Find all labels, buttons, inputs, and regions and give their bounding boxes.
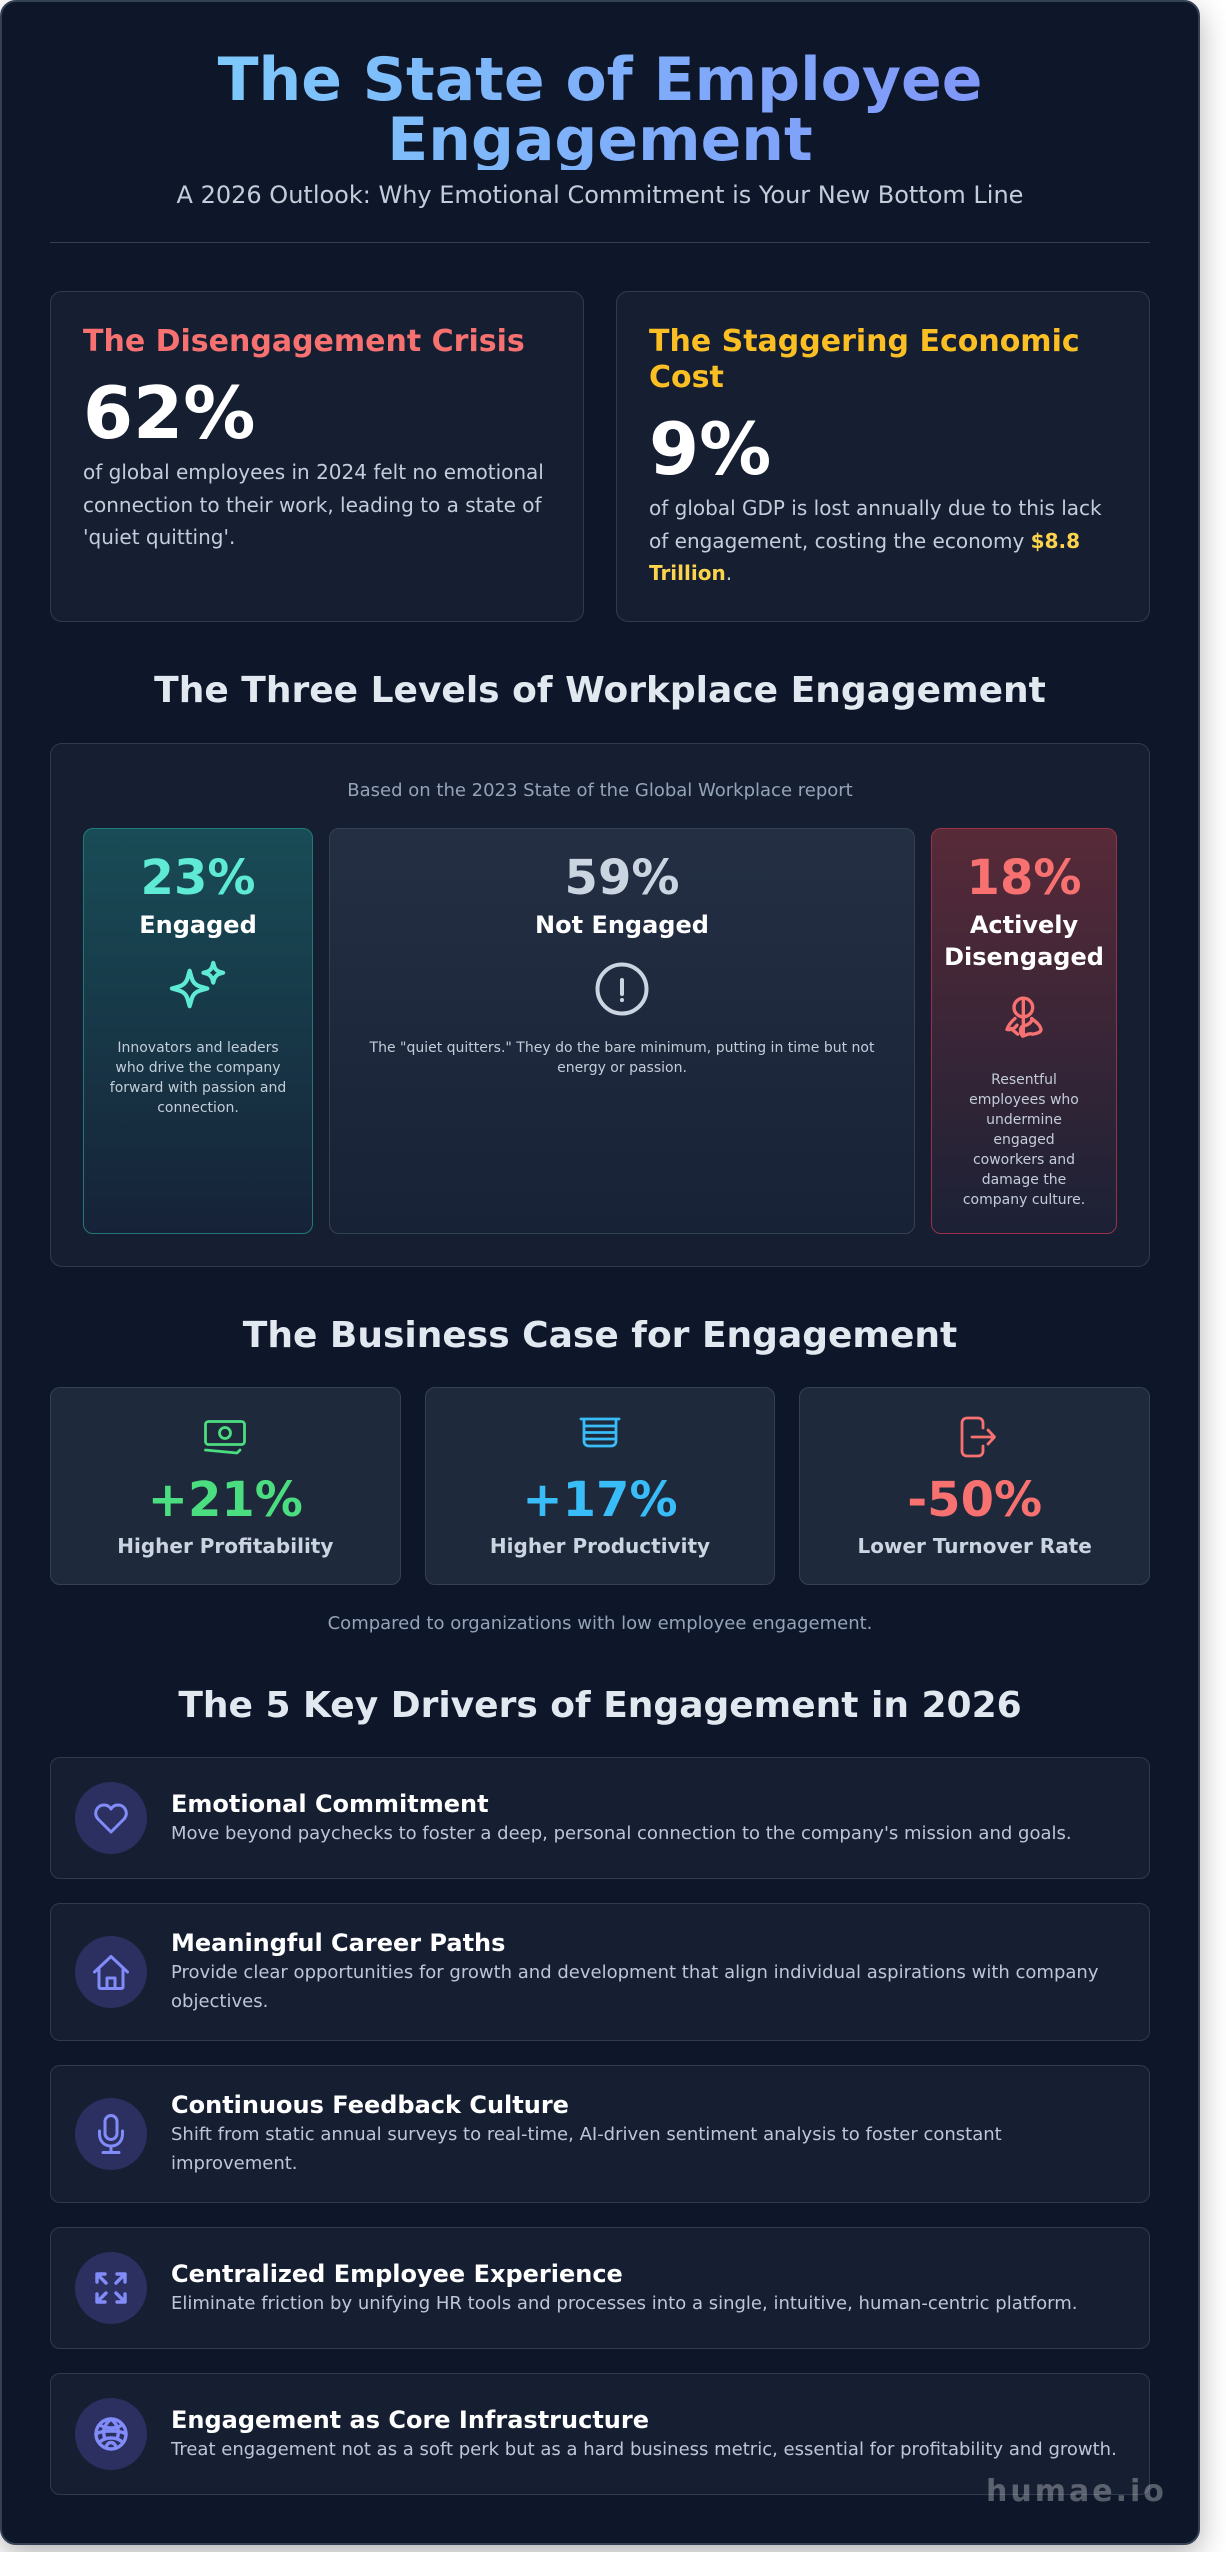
card: turnover xyxy=(799,1387,1150,1585)
panel: three levels xyxy=(50,743,1150,1267)
text: engaged description: forward with passion and xyxy=(110,1080,286,1096)
header divider xyxy=(50,242,1150,243)
text: disengaged description xyxy=(963,1072,1085,1208)
label: not engaged: Not Engaged xyxy=(535,911,709,939)
title: The State of Employee xyxy=(218,45,982,115)
heading: economic cost xyxy=(649,324,1080,395)
title xyxy=(50,50,1150,170)
driver: feedback culture xyxy=(50,2065,1150,2203)
card: profitability xyxy=(50,1387,401,1585)
stat: 18%: 18% xyxy=(967,850,1081,906)
label: actively disengaged xyxy=(944,911,1104,970)
title: Engagement xyxy=(387,105,813,175)
text: crisis description xyxy=(83,460,544,549)
label: actively disengaged: Disengaged xyxy=(944,942,1104,970)
text: not engaged description: The "quiet quitters." They do the bare minimum, putting in time but not xyxy=(370,1040,874,1056)
stat: 23%: 23% xyxy=(141,850,255,906)
text: engaged description xyxy=(110,1040,286,1116)
icon: globe xyxy=(75,2398,147,2470)
title: Continuous Feedback Culture xyxy=(171,2091,569,2119)
label: actively disengaged: Actively xyxy=(970,911,1078,939)
column: not engaged xyxy=(329,828,915,1234)
text: cost description: of global GDP is lost annually due to this lack xyxy=(649,496,1102,520)
driver: career paths xyxy=(50,1903,1150,2041)
icon: exit arrow xyxy=(960,1416,996,1458)
column: actively disengaged xyxy=(931,828,1117,1234)
note: comparison: Compared to organizations with low employee engagement. xyxy=(328,1613,872,1634)
icon: arrows expand xyxy=(75,2252,147,2324)
label: engaged: Engaged xyxy=(139,911,257,939)
text: engaged description: connection. xyxy=(157,1100,239,1116)
heading: key drivers: The 5 Key Drivers of Engagement in 2026 xyxy=(178,1685,1022,1726)
label: turnover: Lower Turnover Rate xyxy=(857,1534,1092,1558)
text: disengaged description: undermine xyxy=(986,1112,1062,1128)
text: disengaged description: coworkers and xyxy=(973,1152,1075,1168)
icon: microphone xyxy=(75,2098,147,2170)
description: Treat engagement not as a soft perk but as a hard business metric, essential for profitability and growth. xyxy=(171,2439,1117,2460)
description: Provide clear opportunities for growth and development that align individual aspirations with company xyxy=(171,1962,1098,1983)
icon: stack xyxy=(580,1418,620,1448)
text: disengaged description: damage the xyxy=(982,1172,1066,1188)
heading: disengagement crisis: The Disengagement Crisis xyxy=(83,324,525,359)
heading: economic cost: The Staggering Economic xyxy=(649,324,1080,359)
heading: business case: The Business Case for Engagement xyxy=(243,1315,957,1356)
panel: disengagement crisis xyxy=(50,291,584,622)
label: profitability: Higher Profitability xyxy=(117,1534,333,1558)
text: engaged description: who drive the company xyxy=(115,1060,281,1076)
icon: home xyxy=(75,1936,147,2008)
text: crisis description: 'quiet quitting'. xyxy=(83,525,235,549)
title: Engagement as Core Infrastructure xyxy=(171,2406,649,2434)
stat: -50%: -50% xyxy=(907,1472,1042,1528)
icon: heart xyxy=(75,1782,147,1854)
text: cost description: of engagement, costing the economy $8.8 xyxy=(649,529,1080,553)
text: crisis description: connection to their work, leading to a state of xyxy=(83,493,542,517)
source note: Based on the 2023 State of the Global Workplace report xyxy=(347,780,853,801)
description: Move beyond paychecks to foster a deep, personal connection to the company's mission and goals. xyxy=(171,1823,1072,1844)
text: cost description: Trillion. xyxy=(649,561,732,585)
text: disengaged description: company culture. xyxy=(963,1192,1085,1208)
text: not engaged description xyxy=(369,1040,874,1076)
driver: core infrastructure xyxy=(50,2373,1150,2495)
column: engaged xyxy=(83,828,313,1234)
driver: employee experience xyxy=(50,2227,1150,2349)
heading: three levels: The Three Levels of Workplace Engagement xyxy=(154,670,1046,711)
stat: 62%: 62% xyxy=(83,371,255,455)
card: productivity xyxy=(425,1387,775,1585)
stat: 9%: 9% xyxy=(649,407,771,491)
subtitle: A 2026 Outlook: Why Emotional Commitment is Your New Bottom Line xyxy=(177,180,1023,208)
text: disengaged description: engaged xyxy=(993,1132,1055,1148)
driver: emotional commitment xyxy=(50,1757,1150,1879)
stat: 59%: 59% xyxy=(565,850,679,906)
label: productivity: Higher Productivity xyxy=(490,1534,710,1558)
title: Centralized Employee Experience xyxy=(171,2260,623,2288)
text: crisis description: of global employees in 2024 felt no emotional xyxy=(83,460,544,484)
description: Eliminate friction by unifying HR tools and processes into a single, intuitive, human-centric platform. xyxy=(171,2293,1078,2314)
text: engaged description: Innovators and leaders xyxy=(117,1040,279,1056)
title: Meaningful Career Paths xyxy=(171,1929,505,1957)
icon: exclamation circle xyxy=(596,962,648,1016)
description: improvement. xyxy=(171,2153,298,2174)
description: Shift from static annual surveys to real-time, AI-driven sentiment analysis to foster constant xyxy=(171,2124,1002,2145)
text: disengaged description: Resentful xyxy=(991,1072,1057,1088)
icon: banknote xyxy=(204,1420,246,1454)
icon: sparkles xyxy=(170,960,226,1008)
icon: rocket xyxy=(1005,996,1043,1038)
text: disengaged description: employees who xyxy=(969,1092,1079,1108)
heading: economic cost: Cost xyxy=(649,360,724,395)
description xyxy=(171,1962,1098,2012)
stat: +17%: +17% xyxy=(522,1472,678,1528)
watermark: humae.io xyxy=(986,2474,1167,2509)
text: not engaged description: energy or passion. xyxy=(557,1060,687,1076)
description: objectives. xyxy=(171,1991,268,2012)
description xyxy=(171,2124,1002,2174)
title: Emotional Commitment xyxy=(171,1790,489,1818)
text: cost description xyxy=(649,496,1102,585)
stat: +21%: +21% xyxy=(148,1472,303,1528)
panel: economic cost xyxy=(616,291,1150,622)
